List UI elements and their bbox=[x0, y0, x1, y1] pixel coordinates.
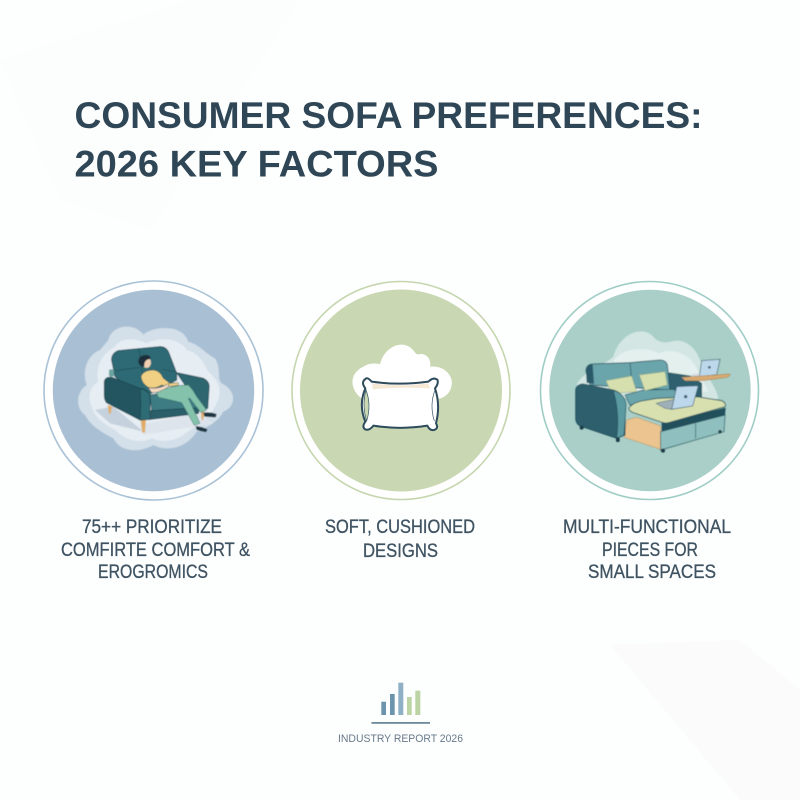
text block: multi-functional label: PIECES FOR bbox=[602, 540, 698, 561]
sofa back bbox=[586, 360, 670, 390]
right arm bbox=[177, 373, 209, 411]
icon ring: comfort bbox=[44, 281, 263, 500]
text block: multi-functional label bbox=[563, 517, 731, 583]
panel: soft cushioned designs bbox=[292, 282, 510, 500]
text block: comfort label: 75++ PRIORITIZE bbox=[82, 517, 222, 538]
right arm bbox=[668, 373, 702, 397]
text block: multi-functional label: SMALL SPACES bbox=[588, 562, 716, 583]
text block: comfort label: COMFIRTE COMFORT & bbox=[61, 540, 250, 561]
icon ring: multi-functional bbox=[540, 282, 758, 500]
text block: comfort label bbox=[61, 517, 250, 583]
icon disc: comfort bbox=[53, 290, 254, 491]
icon disc: cushion bbox=[300, 290, 502, 492]
footer text: INDUSTRY REPORT 2026 bbox=[338, 733, 463, 745]
person bbox=[141, 370, 178, 388]
storage drawer: wooden bbox=[624, 417, 661, 449]
icon: pillow on a cloud bbox=[352, 345, 452, 430]
storage drawers: ottoman bbox=[661, 415, 725, 450]
text block: comfort label: EROGROMICS bbox=[98, 562, 208, 583]
seat bbox=[150, 390, 198, 411]
title: 2026 KEY FACTORS bbox=[74, 144, 438, 184]
left arm bbox=[576, 384, 625, 438]
panel: comfort and ergonomics bbox=[44, 281, 263, 500]
cushions bbox=[606, 376, 637, 393]
feet bbox=[580, 426, 584, 430]
text block: cushion label: SOFT, CUSHIONED bbox=[325, 517, 475, 538]
legs bbox=[108, 405, 112, 414]
text block: multi-functional label: MULTI-FUNCTIONAL bbox=[563, 517, 731, 538]
title: CONSUMER SOFA PREFERENCES: bbox=[74, 95, 703, 136]
side table with laptop bbox=[699, 359, 720, 377]
ottoman cushion bbox=[629, 397, 725, 423]
seat bbox=[625, 389, 685, 405]
icon: storage sofa with laptops bbox=[576, 331, 730, 453]
left arm bbox=[104, 377, 150, 420]
icon: person relaxing in armchair on a cloud bbox=[78, 327, 233, 450]
text block: cushion label bbox=[325, 517, 475, 562]
footer icon: bar chart bbox=[372, 683, 430, 724]
text block: cushion label: DESIGNS bbox=[363, 541, 438, 562]
laptop on ottoman bbox=[672, 386, 698, 409]
icon disc: multi-functional bbox=[549, 290, 751, 491]
title bbox=[74, 95, 703, 184]
back cushion bbox=[112, 347, 177, 398]
icon ring: cushion bbox=[292, 282, 510, 500]
panel: multi-functional pieces bbox=[540, 282, 758, 500]
